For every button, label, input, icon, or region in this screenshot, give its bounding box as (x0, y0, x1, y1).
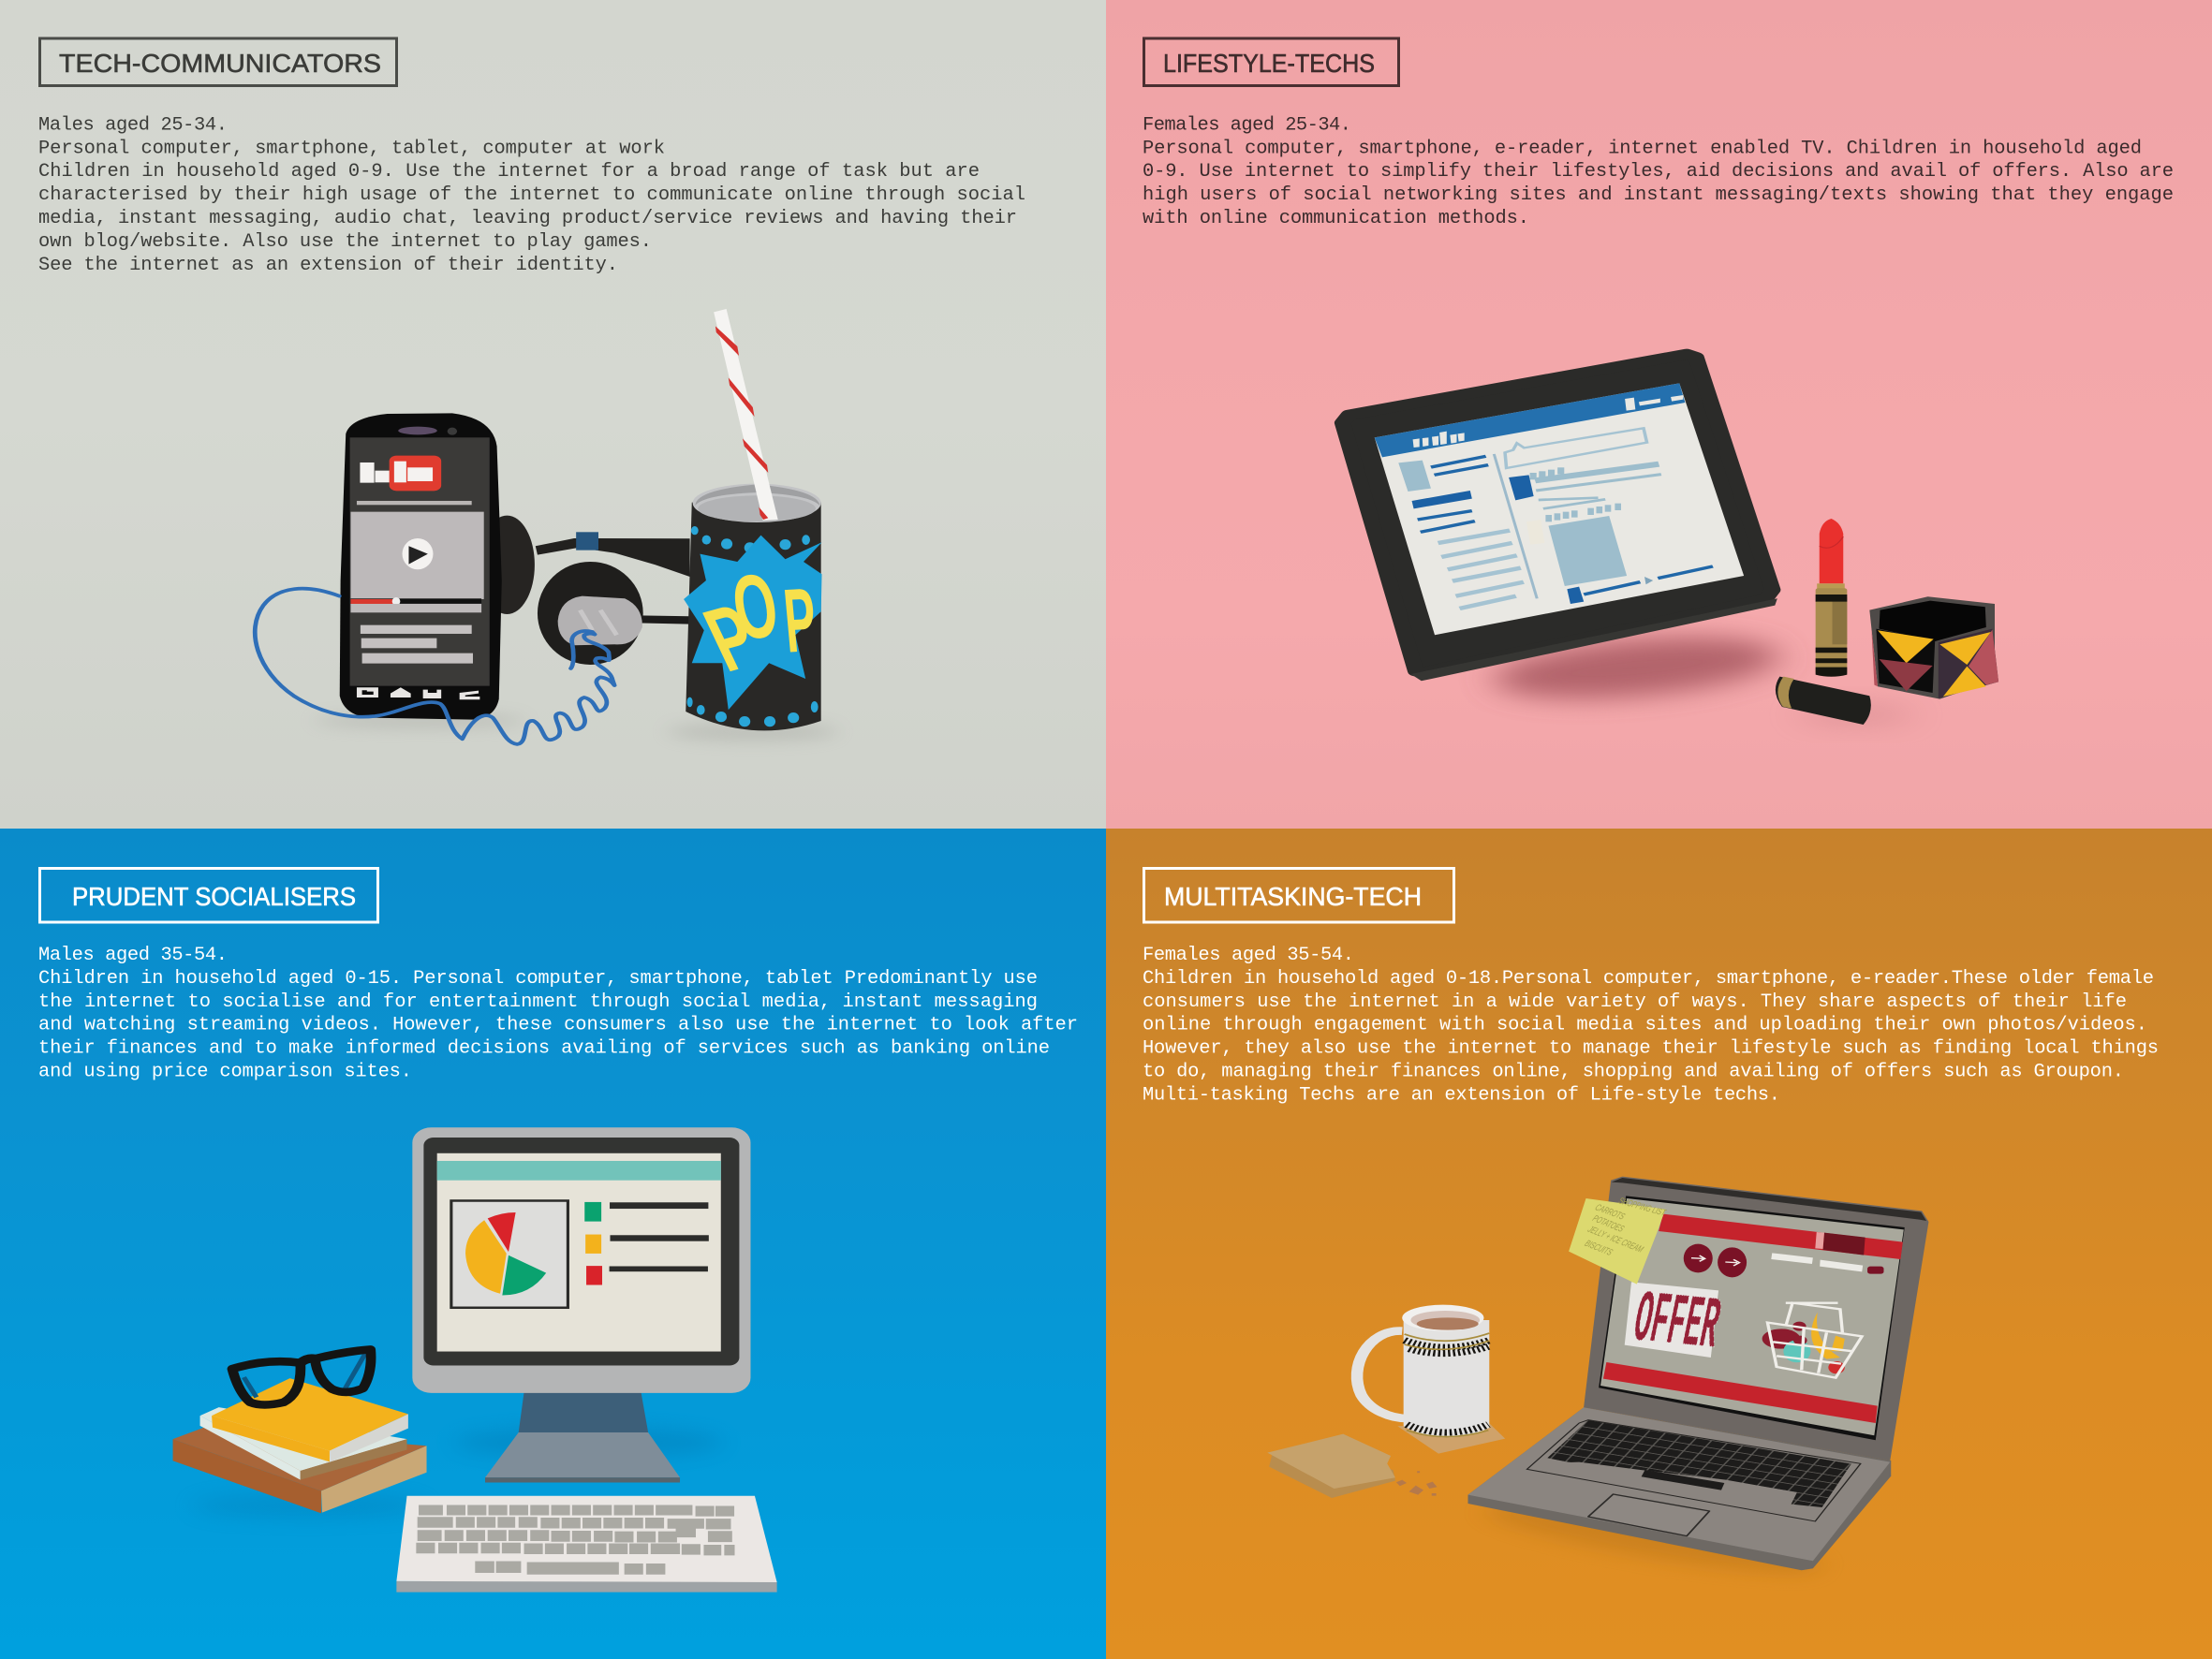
icon: geometric bracelet (1869, 596, 1998, 699)
text block: lifestyle-techs description: high users of social networking sites and instant messaging/texts showing that they engage (1143, 184, 2174, 206)
icon: lipstick (1816, 519, 1847, 677)
icon: smartphone (340, 413, 502, 720)
text block: multitasking-tech description: Multi-tasking Techs are an extension of Life-style techs. (1143, 1084, 1780, 1106)
text block: prudent socialisers description: and watching streaming videos. However, these consumers also use the internet to look after (38, 1015, 1078, 1036)
text block: multitasking-tech description: Children in household aged 0-18.Personal computer, smartphone, e-reader.These older female (1143, 968, 2154, 990)
text block: lifestyle-techs description: with online communication methods. (1143, 208, 1529, 229)
heading: lifestyle-techs: LIFESTYLE-TECHS (1163, 49, 1375, 78)
text block: lifestyle-techs description: 0-9. Use internet to simplify their lifestyles, aid decisions and avail of offers. Also are (1143, 161, 2174, 183)
heading: multitasking-tech: MULTITASKING-TECH (1164, 882, 1422, 911)
icon: sticky note: JELLY + ICE CREAM (1585, 1225, 1646, 1255)
icon: lipstick cap (1776, 677, 1871, 725)
text block: tech-communicators description: characterised by their high usage of the internet to communicate online through social (38, 184, 1025, 206)
panel: tech-communicators (0, 0, 1106, 829)
text block: multitasking-tech description: However, they also use the internet to manage their lifestyle such as finding local things (1143, 1038, 2159, 1060)
icon: soda can with straw (684, 309, 822, 730)
illustration: monitor, keyboard, books and glasses (173, 1127, 777, 1593)
heading: prudent socialisers (39, 869, 378, 922)
panel: multitasking-tech (1106, 829, 2212, 1659)
text: POP lettering: P (690, 585, 774, 691)
text block: lifestyle-techs description: Females aged 25-34. (1143, 114, 1351, 136)
icon: shopping basket (1762, 1303, 1862, 1378)
text block: tech-communicators description: Children in household aged 0-9. Use the internet for a broad range of task but are (38, 161, 980, 183)
text block: multitasking-tech description: online through engagement with social media sites and uploading their own photos/videos. (1143, 1015, 2147, 1036)
text block: lifestyle-techs description (1143, 114, 2174, 229)
icon: sticky note: SHOPPING LIST (1616, 1196, 1669, 1218)
illustration: laptop, mug and biscuit (1267, 1177, 1928, 1585)
text block: prudent socialisers description: the internet to socialise and for entertainment through social media, instant messaging (38, 991, 1038, 1013)
icon: stack of books (173, 1378, 427, 1513)
icon: monitor stand (485, 1392, 680, 1483)
icon: keyboard (396, 1496, 777, 1593)
keyboard keys (1547, 1420, 1851, 1507)
text block: prudent socialisers description: Children in household aged 0-15. Personal computer, smartphone, tablet Predominantly use (38, 968, 1038, 990)
text block: tech-communicators description: own blog/website. Also use the internet to play games. (38, 231, 652, 253)
keyboard outline (1527, 1420, 1861, 1521)
text block: prudent socialisers description: Males aged 35-54. (38, 945, 228, 966)
illustration: tablet, lipstick and bracelet (1343, 354, 1998, 725)
panel: lifestyle-techs (1106, 0, 2212, 829)
text block: multitasking-tech description (1143, 945, 2159, 1106)
text block: prudent socialisers description: their finances and to make informed decisions availing of services such as banking online (38, 1038, 1050, 1060)
text block: tech-communicators description: See the internet as an extension of their identity. (38, 255, 618, 276)
heading: tech-communicators: TECH-COMMUNICATORS (59, 49, 381, 78)
spacebar (1642, 1470, 1724, 1490)
panel: prudent socialisers (0, 829, 1106, 1659)
chart: pie chart (451, 1200, 568, 1308)
heading: lifestyle-techs (1144, 38, 1399, 86)
icon: sticky note: BISCUITS (1583, 1239, 1615, 1257)
text block: multitasking-tech description: consumers use the internet in a wide variety of ways. They share aspects of their life (1143, 991, 2127, 1013)
icon: monitor (412, 1127, 750, 1393)
text block: lifestyle-techs description: Personal computer, smartphone, e-reader, internet enabled TV. Children in household aged (1143, 138, 2142, 159)
text block: multitasking-tech description: to do, managing their finances online, shopping and availing of offers such as Groupon. (1143, 1062, 2124, 1082)
text block: tech-communicators description: Personal computer, smartphone, tablet, computer at work (38, 138, 665, 159)
text block: prudent socialisers description: and using price comparison sites. (38, 1062, 412, 1082)
icon: sticky note (1569, 1196, 1669, 1285)
text block: tech-communicators description (38, 114, 1025, 276)
text block: prudent socialisers description (38, 945, 1078, 1082)
text block: tech-communicators description: media, instant messaging, audio chat, leaving product/service reviews and having their (38, 208, 1017, 229)
text block: multitasking-tech description: Females aged 35-54. (1143, 945, 1354, 966)
panel: offer card: OFFER (1627, 1279, 1726, 1369)
chart legend (584, 1202, 709, 1285)
icon: coiled blue cable (255, 589, 614, 744)
trackpad (1588, 1494, 1709, 1536)
icon: headphones (479, 516, 690, 665)
icon: coffee mug (1357, 1305, 1505, 1454)
icon: laptop (1468, 1177, 1928, 1570)
text block: tech-communicators description: Males aged 25-34. (38, 114, 228, 136)
illustration: phone, headphones and soda can (255, 309, 838, 744)
icon: tablet (1343, 354, 1777, 681)
text: POP lettering: O (725, 553, 786, 659)
heading: tech-communicators (39, 38, 397, 86)
heading: multitasking-tech (1144, 869, 1453, 922)
icon: sticky note: POTATOES (1590, 1213, 1627, 1234)
text: POP lettering (690, 553, 820, 691)
icon: glasses (232, 1349, 371, 1404)
text: POP lettering: P (780, 569, 820, 672)
icon: sticky note: CARROTS (1593, 1202, 1628, 1222)
heading: prudent socialisers: PRUDENT SOCIALISERS (72, 882, 356, 911)
icon: biscuit and crumbs (1267, 1434, 1438, 1498)
icon: striped straw (714, 309, 778, 521)
